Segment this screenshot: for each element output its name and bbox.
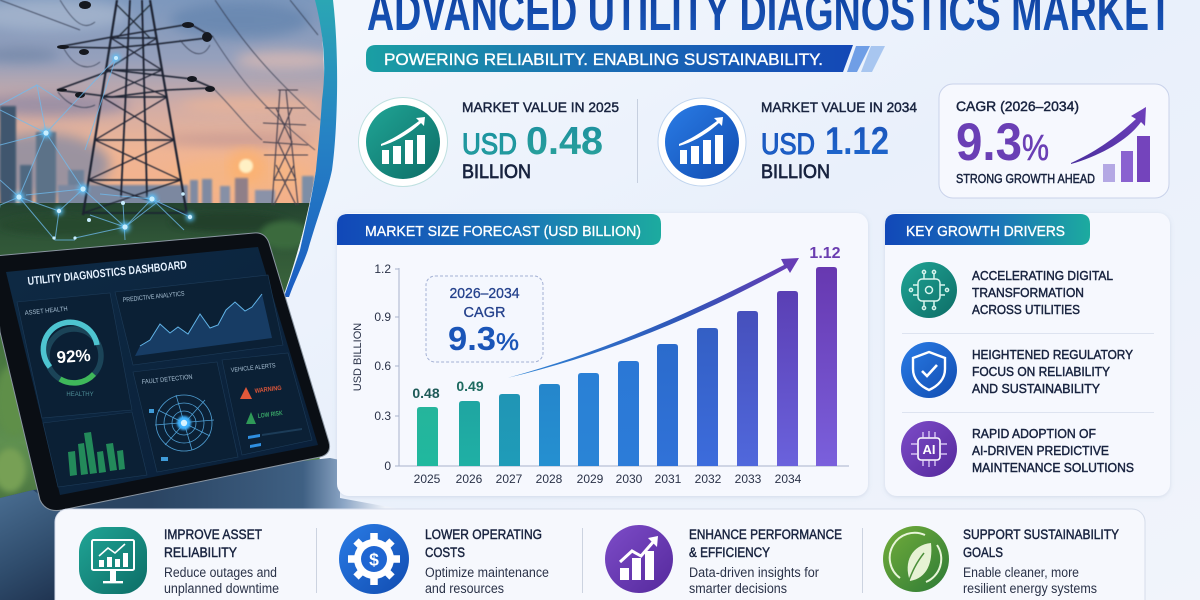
photo: transmission towers at sunset	[0, 0, 340, 503]
callout: CAGR: %	[496, 329, 519, 356]
benefit: performance and efficiency: & EFFICIENCY	[689, 545, 770, 560]
callout: CAGR: 9.3	[448, 320, 496, 357]
KPI: market value 2025: USD	[462, 128, 517, 161]
screen	[6, 247, 318, 495]
icon: gear with dollar	[339, 524, 409, 594]
driver: regulatory focus: HEIGHTENED REGULATORY	[972, 347, 1133, 362]
benefit: asset reliability: RELIABILITY	[164, 545, 237, 560]
network overlay	[0, 54, 194, 240]
callout: CAGR: 2026–2034	[450, 286, 520, 302]
driver: AI predictive maintenance: RAPID ADOPTION OF	[972, 426, 1096, 441]
KPI: market value 2025: MARKET VALUE IN 2025	[462, 99, 619, 115]
panel: asset health: HEALTHY	[66, 392, 94, 398]
photo curved band	[284, 0, 337, 297]
benefit: sustainability: SUPPORT SUSTAINABILITY	[963, 527, 1119, 542]
bar chart: 2032	[695, 472, 722, 486]
benefit: asset reliability: unplanned downtime	[164, 581, 279, 596]
subtitle banner: POWERING RELIABILITY. ENABLING SUSTAINABILITY.	[384, 51, 823, 69]
sky	[0, 0, 340, 210]
driver: digital transformation	[901, 262, 1113, 318]
icon: AI chip: AI	[922, 442, 936, 457]
icon: shield	[901, 342, 957, 398]
bar chart: USD BILLION	[352, 323, 364, 391]
KPI: market value 2034: MARKET VALUE IN 2034	[761, 99, 917, 115]
bar chart: 2028	[536, 472, 563, 486]
bar chart: 1.2	[374, 262, 391, 276]
driver: digital transformation: ACROSS UTILITIES	[972, 302, 1080, 317]
bar chart: 0.49	[456, 378, 484, 394]
panel: predictive analytics: PREDICTIVE ANALYTICS	[122, 290, 185, 304]
bar chart: 2029	[577, 472, 604, 486]
bar chart: 2031	[655, 472, 682, 486]
KPI: market value 2034: USD	[761, 128, 815, 161]
panel: asset health: 92%	[56, 346, 91, 367]
driver: regulatory focus: FOCUS ON RELIABILITY	[972, 364, 1110, 379]
benefit: performance and efficiency: smarter decisions	[689, 581, 787, 596]
driver: AI predictive maintenance: AI-DRIVEN PREDICTIVE	[972, 443, 1109, 458]
tablet	[0, 233, 330, 511]
panel: CAGR card	[939, 84, 1169, 198]
driver: regulatory focus	[901, 342, 1133, 398]
bar chart: 2030	[616, 472, 643, 486]
panel: benefits strip	[55, 509, 1145, 600]
bar chart: 0.9	[374, 310, 391, 324]
tower insulators	[57, 1, 215, 98]
bar chart: 2034	[775, 472, 802, 486]
desk surface	[0, 458, 400, 600]
icon: AI chip	[901, 421, 957, 477]
benefit: sustainability: Enable cleaner, more	[963, 565, 1079, 580]
benefit: operating costs: LOWER OPERATING	[425, 527, 542, 542]
benefit: performance and efficiency: Data-driven insights for	[689, 565, 819, 580]
benefit: asset reliability	[79, 527, 279, 596]
heading	[337, 214, 661, 245]
bar chart: 1.12	[809, 245, 841, 262]
dashboard title: UTILITY DIAGNOSTICS DASHBOARD	[27, 259, 187, 288]
bar chart: 0	[384, 459, 391, 473]
driver: AI predictive maintenance: MAINTENANCE SOLUTIONS	[972, 460, 1134, 475]
bar chart	[352, 245, 849, 486]
KPI: market value 2025: BILLION	[462, 162, 531, 183]
KPI: market value 2025: 0.48	[526, 120, 603, 163]
icon: gear with dollar: $	[369, 550, 379, 570]
callout: CAGR: CAGR	[464, 305, 505, 321]
gauge	[43, 322, 101, 383]
benefit: operating costs: and resources	[425, 581, 504, 596]
icon: blue growth chart	[658, 98, 746, 186]
KPI: market value 2034	[658, 98, 917, 186]
bar chart: 0.6	[374, 359, 391, 373]
panel: fault detection: FAULT DETECTION	[141, 374, 193, 386]
icon: monitor	[79, 527, 147, 594]
subtitle banner	[366, 45, 885, 72]
driver: regulatory focus: AND SUSTAINABILITY	[972, 381, 1100, 396]
heading: KEY GROWTH DRIVERS	[906, 223, 1065, 240]
callout: CAGR	[426, 276, 543, 362]
panel: vehicle alerts: LOW RISK	[257, 410, 283, 420]
icon: growth bars and arrow	[1071, 107, 1150, 182]
benefit: asset reliability: IMPROVE ASSET	[164, 527, 262, 542]
KPI: market value 2025	[358, 98, 619, 186]
tablet body	[0, 233, 330, 511]
panel: vehicle alerts	[222, 353, 312, 455]
driver: digital transformation: TRANSFORMATION	[972, 285, 1084, 300]
benefit: operating costs	[339, 524, 549, 596]
panel: CAGR card: %	[1022, 127, 1049, 168]
benefit: performance and efficiency: ENHANCE PERFORMANCE	[689, 527, 842, 542]
icon: teal growth chart	[358, 98, 448, 186]
panel: bar chart	[43, 412, 147, 487]
clouds	[0, 0, 335, 197]
panel: vehicle alerts: VEHICLE ALERTS	[230, 362, 276, 374]
icon: chip	[901, 262, 957, 318]
KPI: market value 2034: 1.12	[825, 120, 889, 163]
benefit: performance and efficiency	[605, 525, 842, 596]
bar chart: 2027	[496, 472, 523, 486]
arrow: growth trend	[507, 258, 799, 378]
panel: predictive analytics	[115, 275, 283, 365]
sun	[228, 148, 264, 184]
benefit: sustainability	[883, 526, 1119, 596]
panel: key growth drivers	[885, 213, 1170, 496]
icon: leaf	[883, 526, 949, 592]
far tower	[263, 90, 308, 205]
bar chart: 0.3	[374, 409, 391, 423]
driver: digital transformation: ACCELERATING DIGITAL	[972, 268, 1113, 283]
benefit: asset reliability: Reduce outages and	[164, 565, 277, 580]
panel: asset health: ASSET HEALTH	[24, 306, 68, 317]
panel: CAGR card: STRONG GROWTH AHEAD	[956, 172, 1095, 186]
panel: market size forecast	[337, 213, 868, 496]
benefit: sustainability: resilient energy systems	[963, 581, 1097, 596]
icon: growth chart	[605, 525, 673, 593]
benefit: sustainability: GOALS	[963, 545, 1003, 560]
panel: asset health	[17, 293, 132, 418]
panel: vehicle alerts: WARNING	[254, 385, 282, 395]
bar chart: 2026	[456, 472, 483, 486]
driver: AI predictive maintenance	[901, 421, 1134, 477]
panel: CAGR card: 9.3	[956, 113, 1022, 172]
bar chart: 2033	[735, 472, 762, 486]
benefit: operating costs: Optimize maintenance	[425, 565, 549, 580]
main tower	[0, 0, 320, 215]
heading: MARKET SIZE FORECAST (USD BILLION)	[365, 223, 641, 240]
bar chart: 0.48	[412, 385, 440, 401]
heading	[885, 214, 1090, 245]
city skyline	[0, 106, 314, 206]
KPI: market value 2034: BILLION	[761, 162, 830, 183]
bar chart: 2025	[414, 472, 441, 486]
panel: CAGR card: CAGR (2026–2034)	[956, 98, 1079, 114]
panel: fault detection	[133, 362, 238, 472]
tree line	[0, 203, 340, 503]
benefit: operating costs: COSTS	[425, 545, 465, 560]
